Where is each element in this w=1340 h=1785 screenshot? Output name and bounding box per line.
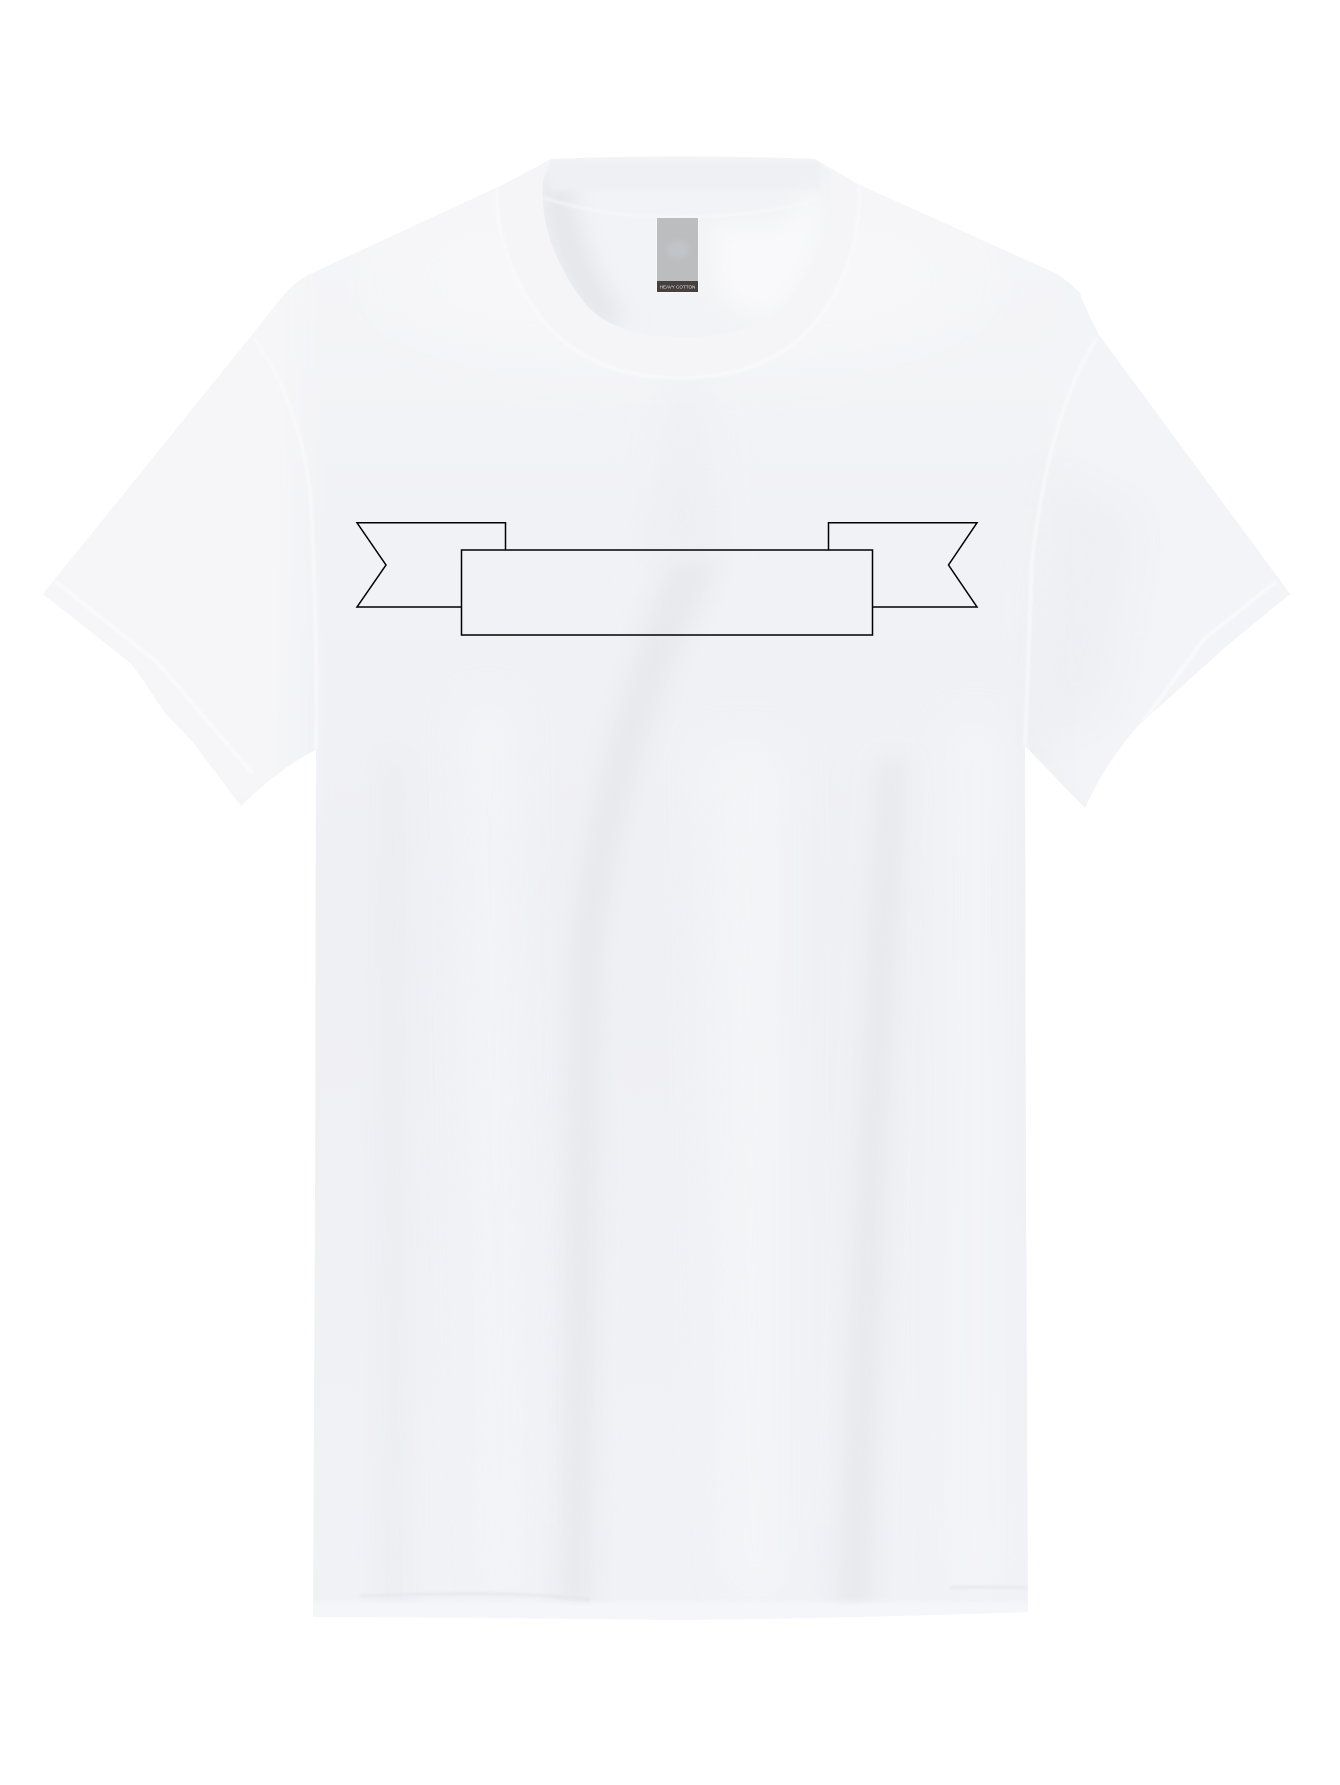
illustration: t-shirt mockup with ribbon [43,156,1290,1620]
ribbon left tail [357,523,506,607]
tag text: HEAVY COTTON [660,284,695,290]
sleeve seams [254,338,316,750]
neck tag [656,217,699,293]
ribbon banner [357,523,977,635]
ribbon centre panel [462,550,872,635]
collar rib [497,159,859,378]
shirt silhouette [43,156,1290,1620]
back neck interior [542,178,620,324]
ribbon right tail [828,523,977,607]
fabric shading and folds [55,527,1276,1600]
